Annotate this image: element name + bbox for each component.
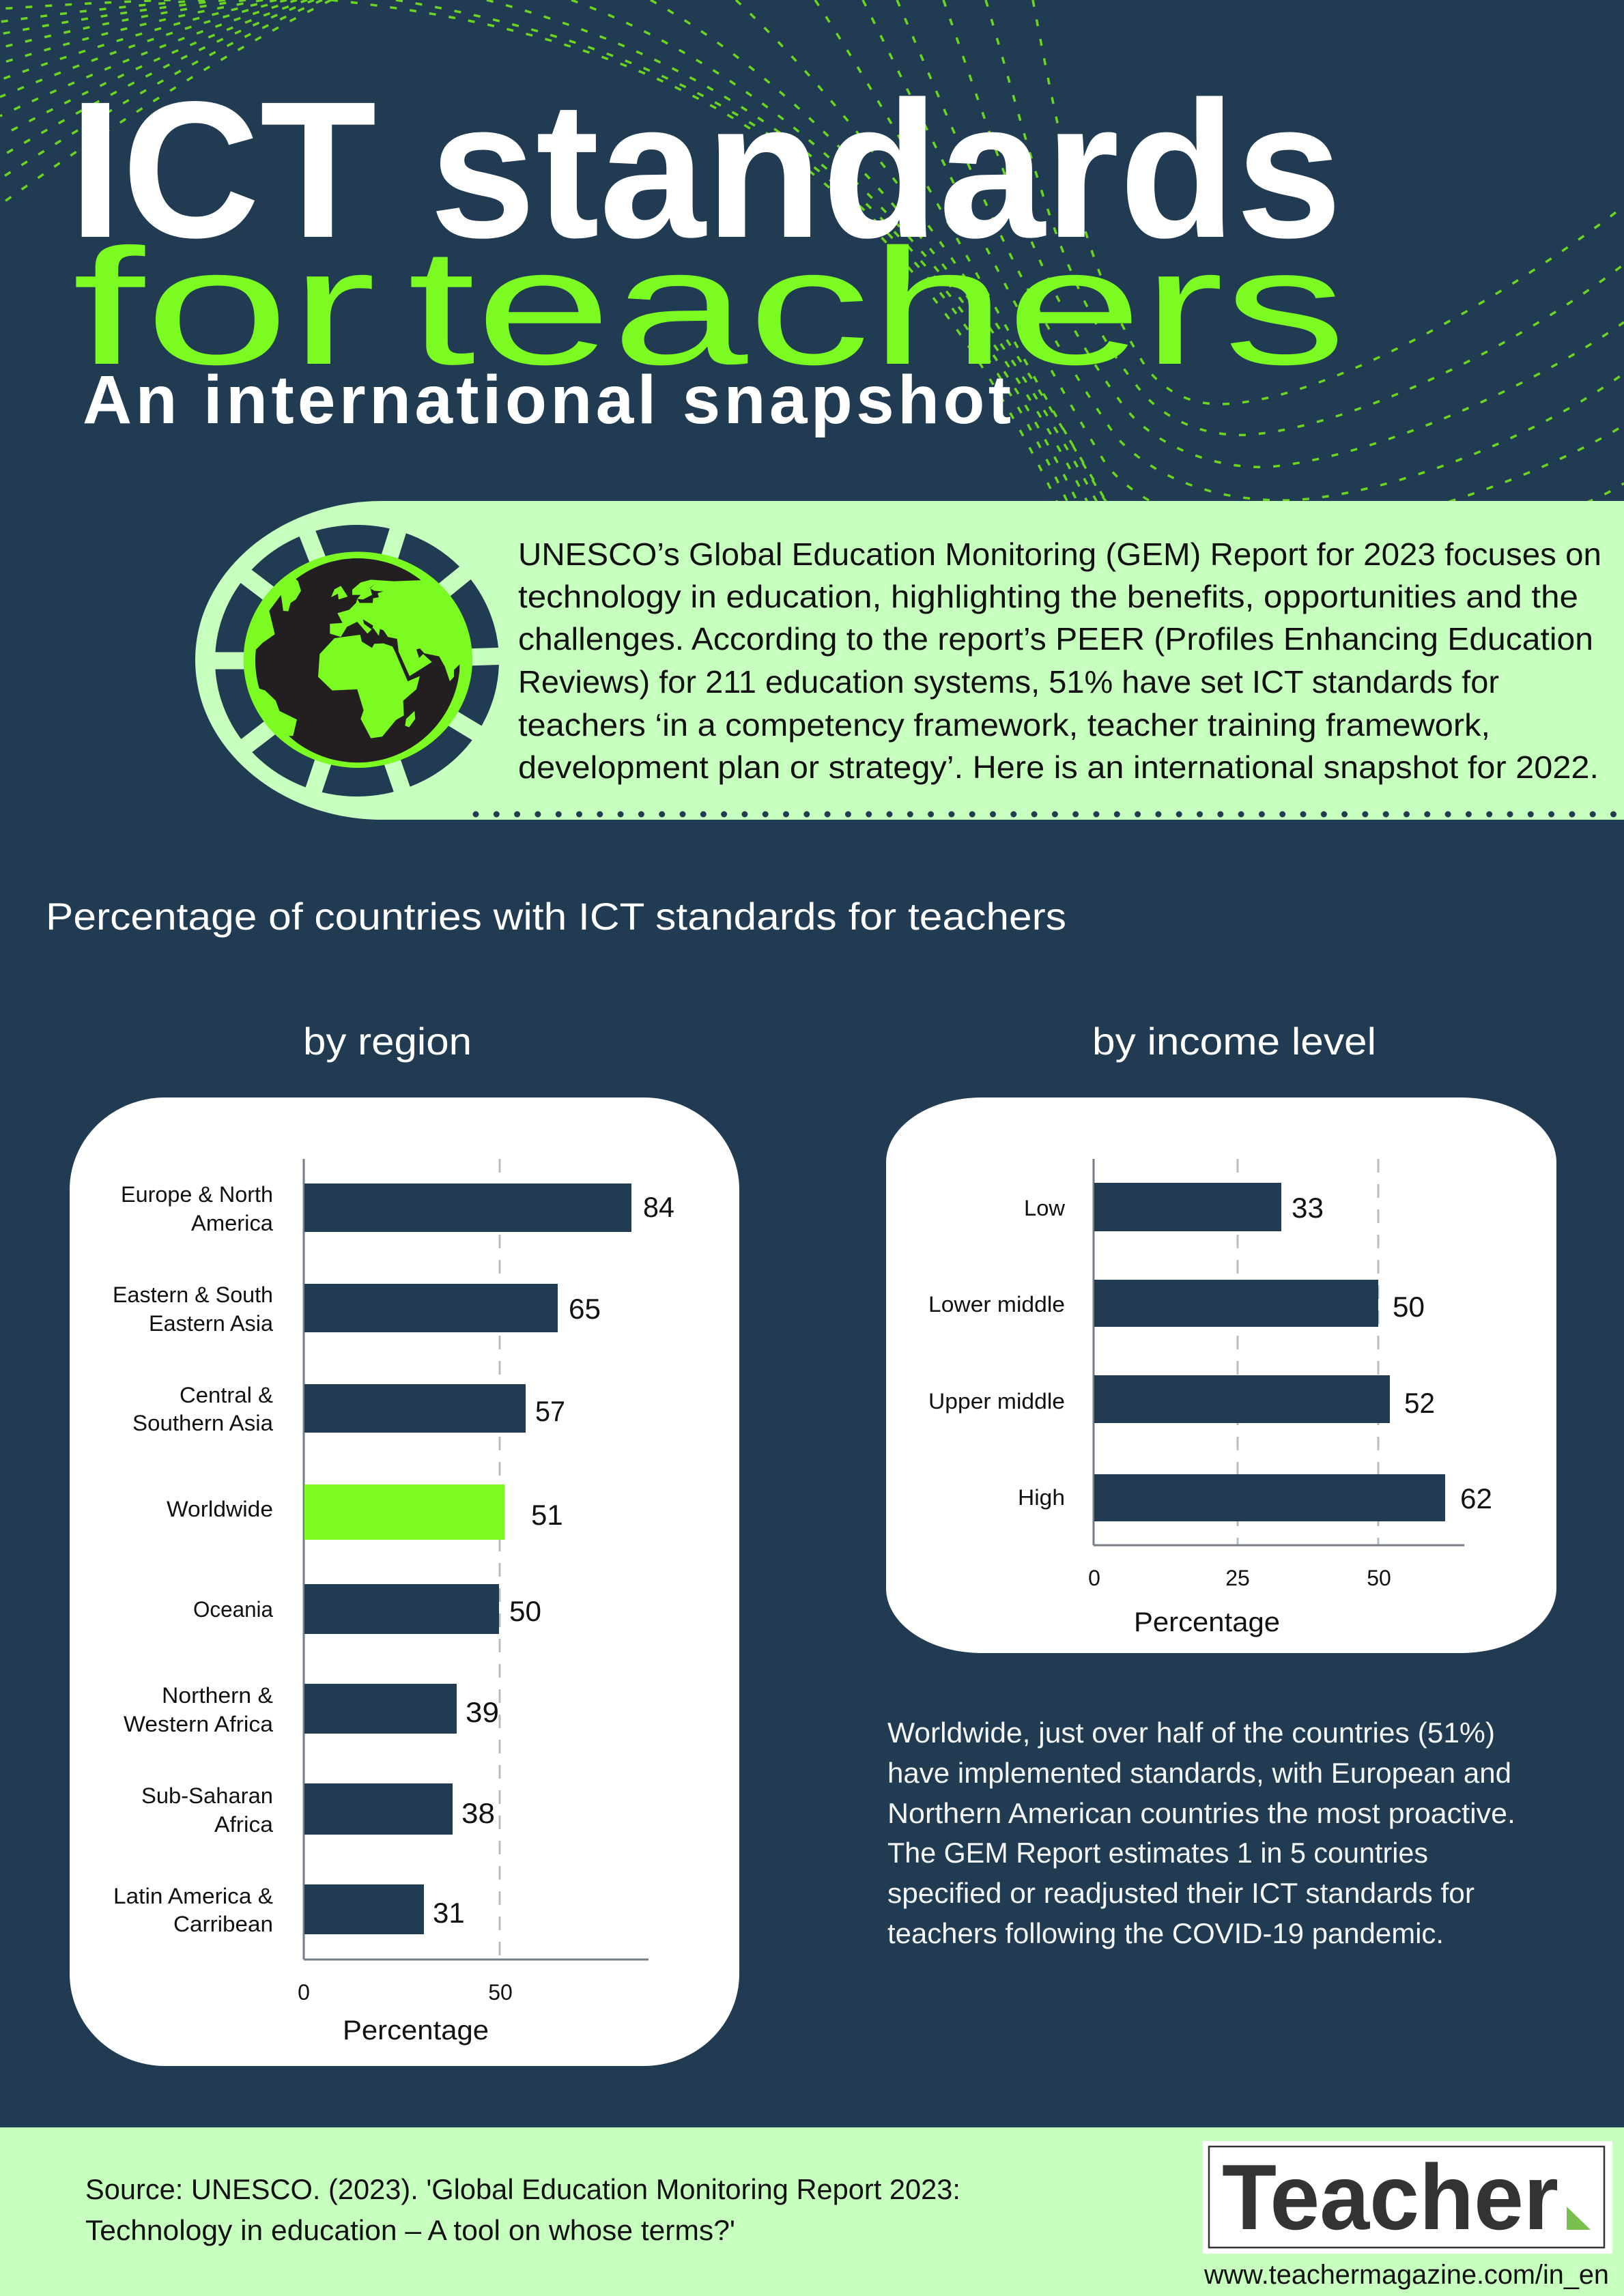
intro text: challenges. According to the report’s PEER (Profiles Enhancing Education — [518, 621, 1593, 657]
bar: Europe & North America 84: 84 — [643, 1191, 674, 1223]
intro text: teachers ‘in a competency framework, teacher training framework, — [518, 707, 1490, 743]
decorative dotted waves — [0, 0, 1624, 572]
bar: Central & Southern Asia 57 — [132, 1383, 565, 1435]
bar: Sub-Saharan Africa 38 — [141, 1783, 495, 1837]
bar: Worldwide 51: 51 — [531, 1499, 563, 1531]
panel: bar chart by region — [70, 1097, 739, 2066]
bar: Northern & Western Africa 39: 39 — [466, 1696, 499, 1728]
panel: introduction — [195, 501, 1624, 820]
text block: worldwide summary: have implemented standards, with European and — [887, 1757, 1511, 1789]
bar: Lower middle 50: 50 — [1393, 1291, 1425, 1323]
bar: Low 33: 33 — [1292, 1192, 1324, 1224]
title: An international snapshot — [83, 362, 1011, 438]
bar: Central & Southern Asia 57: Central & — [180, 1383, 273, 1407]
bar: Sub-Saharan Africa 38: Africa — [214, 1812, 273, 1837]
heading: percentage of countries: Percentage of countries with ICT standards for teachers — [46, 895, 1066, 938]
intro text: Reviews) for 211 education systems, 51% have set ICT standards for — [518, 664, 1499, 700]
x axis labels: 25 — [1225, 1566, 1250, 1590]
bar: Lower middle 50: Lower middle — [928, 1292, 1065, 1317]
intro text: development plan or strategy’. Here is an international snapshot for 2022. — [518, 749, 1599, 785]
bar: Upper middle 52: Upper middle — [928, 1389, 1065, 1414]
bar: Oceania 50: Oceania — [193, 1597, 273, 1622]
bar: Eastern & South Eastern Asia 65: Eastern & South — [113, 1282, 273, 1307]
x axis labels: 0 — [298, 1980, 310, 2005]
text block: worldwide summary: Northern American countries the most proactive. — [887, 1797, 1515, 1829]
source citation — [85, 2173, 960, 2246]
bar: Upper middle 52 — [928, 1375, 1435, 1423]
heading: by income level: by income level — [1092, 1020, 1376, 1063]
bar: Lower middle 50 — [928, 1280, 1425, 1327]
bar: High 62 — [1018, 1474, 1492, 1521]
panel: bar chart by income level — [886, 1097, 1556, 1653]
x axis labels: 0 — [1088, 1566, 1100, 1590]
title: for — [72, 215, 376, 399]
bar: Northern & Western Africa 39 — [124, 1683, 499, 1736]
icon: globe in segmented ring — [215, 525, 499, 797]
bar: Europe & North America 84: Europe & North — [121, 1182, 273, 1207]
bar: Upper middle 52: 52 — [1404, 1387, 1435, 1419]
bar: Low 33: Low — [1024, 1196, 1066, 1220]
intro text: UNESCO’s Global Education Monitoring (GEM) Report for 2023 focuses on — [518, 536, 1601, 572]
bar: Europe & North America 84 — [121, 1182, 674, 1235]
x axis labels: 50 — [488, 1980, 513, 2005]
title — [69, 61, 1346, 438]
bar: Latin America & Carribean 31: Latin America & — [113, 1884, 273, 1908]
bar: Europe & North America 84: America — [191, 1211, 273, 1235]
intro text: technology in education, highlighting the benefits, opportunities and the — [518, 579, 1578, 614]
title: teachers — [408, 215, 1346, 399]
text block: worldwide summary: teachers following the COVID-19 pandemic. — [887, 1917, 1444, 1949]
website url: www.teachermagazine.com/in_en — [1203, 2260, 1609, 2290]
bar: High 62: 62 — [1460, 1482, 1492, 1515]
x axis labels — [298, 1980, 513, 2046]
bar: Latin America & Carribean 31 — [113, 1884, 465, 1936]
bar: Eastern & South Eastern Asia 65 — [113, 1282, 601, 1336]
bar: Eastern & South Eastern Asia 65: 65 — [569, 1293, 601, 1325]
bar: Sub-Saharan Africa 38: Sub-Saharan — [141, 1783, 273, 1808]
footer band — [0, 2127, 1624, 2296]
intro text — [518, 536, 1601, 785]
x axis labels — [1088, 1566, 1391, 1637]
bar: Northern & Western Africa 39: Western Africa — [124, 1712, 273, 1736]
text block: worldwide summary: specified or readjusted their ICT standards for — [887, 1877, 1475, 1909]
bar: Oceania 50: 50 — [509, 1595, 541, 1627]
source citation: Technology in education – A tool on whose terms?' — [85, 2214, 735, 2246]
title: ICT standards — [69, 61, 1342, 278]
bar: Central & Southern Asia 57: 57 — [535, 1395, 565, 1427]
bar: Oceania 50 — [193, 1584, 541, 1634]
bar: Latin America & Carribean 31: 31 — [433, 1897, 465, 1929]
bar: Worldwide 51: Worldwide — [167, 1497, 273, 1521]
bar: Sub-Saharan Africa 38: 38 — [461, 1797, 495, 1829]
text block: worldwide summary — [887, 1717, 1515, 1949]
x axis labels: 50 — [1367, 1566, 1391, 1590]
heading: by region: by region — [303, 1020, 472, 1063]
logo: Teacher: Teacher — [1222, 2145, 1558, 2249]
x axis labels: Percentage — [343, 2015, 489, 2046]
bar: High 62: High — [1018, 1485, 1065, 1510]
bar: Low 33 — [1024, 1183, 1324, 1231]
bar: Central & Southern Asia 57: Southern Asia — [132, 1411, 273, 1435]
x axis labels: Percentage — [1134, 1607, 1280, 1637]
text block: worldwide summary: Worldwide, just over half of the countries (51%) — [887, 1717, 1495, 1749]
text block: worldwide summary: The GEM Report estimates 1 in 5 countries — [887, 1837, 1428, 1869]
bar: Worldwide 51 — [167, 1484, 563, 1540]
source citation: Source: UNESCO. (2023). 'Global Education Monitoring Report 2023: — [85, 2173, 960, 2205]
bar: Eastern & South Eastern Asia 65: Eastern Asia — [149, 1311, 273, 1336]
bar: Latin America & Carribean 31: Carribean — [173, 1912, 273, 1936]
bar: Northern & Western Africa 39: Northern & — [162, 1683, 273, 1708]
